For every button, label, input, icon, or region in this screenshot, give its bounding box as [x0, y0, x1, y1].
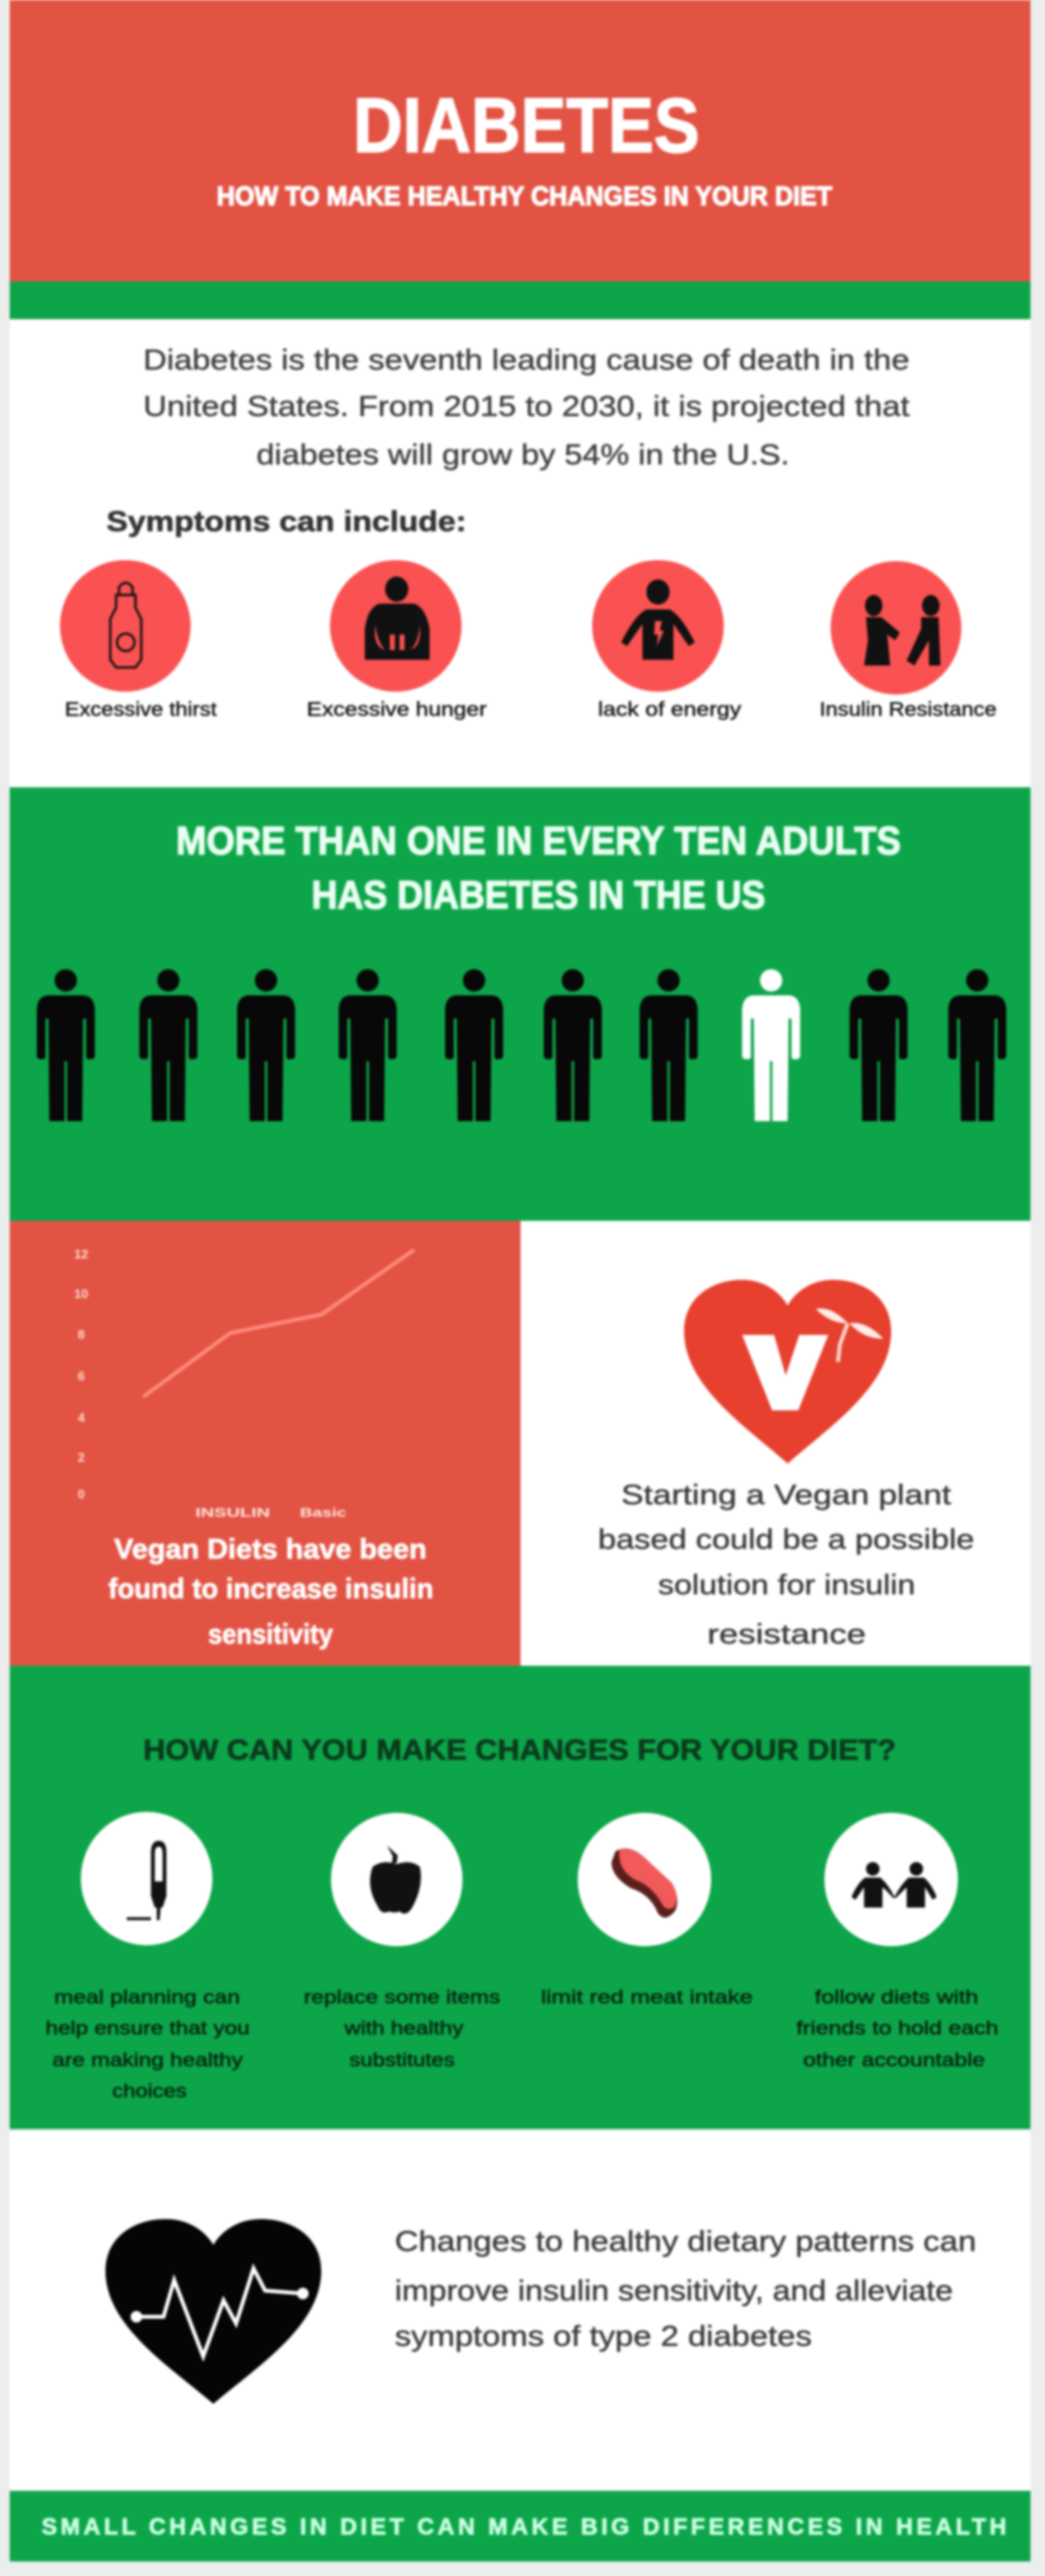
- text: symptoms of type 2 diabetes: [395, 2321, 812, 2353]
- tip: meal planning: [45, 1812, 250, 2102]
- text: resistance: [707, 1619, 866, 1650]
- intro paragraph: diabetes will grow by 54% in the U.S.: [256, 439, 790, 471]
- symptom: insulin resistance: [820, 561, 997, 721]
- line chart: 0: [77, 1487, 85, 1501]
- line chart: 8: [77, 1327, 85, 1342]
- caption: friends to hold each: [796, 2019, 999, 2039]
- text: Changes to healthy dietary patterns can: [395, 2226, 976, 2258]
- text: [598, 1480, 974, 1650]
- text: based could be a possible: [598, 1525, 974, 1555]
- label: lack of energy: [598, 699, 741, 721]
- caption: are making healthy: [52, 2051, 244, 2071]
- label: Insulin Resistance: [820, 699, 997, 721]
- green divider band: [10, 281, 1030, 319]
- caption: sensitivity: [208, 1619, 333, 1650]
- caption: [796, 1988, 999, 2071]
- tip: limit red meat: [541, 1813, 753, 2008]
- caption: [304, 1988, 500, 2071]
- panel: header: [10, 0, 1030, 281]
- caption: [45, 1988, 250, 2102]
- caption: choices: [112, 2082, 187, 2102]
- text: [395, 2226, 976, 2353]
- heading: MORE THAN ONE IN EVERY TEN ADULTS: [176, 818, 901, 863]
- tip: diet with friends: [796, 1813, 999, 2071]
- pictogram: ten people, one highlighted: [37, 969, 1006, 1121]
- footer band: [10, 2491, 1030, 2561]
- caption: Vegan Diets have been: [114, 1534, 427, 1565]
- symptom: excessive thirst: [60, 560, 217, 721]
- icon: pen: [127, 1841, 166, 1920]
- line chart: 12: [75, 1247, 88, 1261]
- caption: meal planning can: [54, 1988, 240, 2008]
- icon: black heart with pulse: [105, 2219, 321, 2404]
- line chart: [75, 1247, 414, 1520]
- footer text: SMALL CHANGES IN DIET CAN MAKE BIG DIFFERENCES IN HEALTH: [42, 2514, 1006, 2540]
- intro paragraph: United States. From 2015 to 2030, it is projected that: [143, 391, 911, 423]
- line chart: 6: [77, 1369, 85, 1383]
- text: improve insulin sensitivity, and alleviate: [395, 2275, 953, 2307]
- panel: one in ten adults: [10, 787, 1030, 1221]
- panel: vegan heart: [521, 1221, 1030, 1666]
- icon: two friends holding hands: [851, 1862, 937, 1908]
- icon: two people with injection: [864, 595, 940, 666]
- icon: vegan heart with sprout: [684, 1280, 891, 1464]
- line chart: INSULIN: [195, 1505, 270, 1520]
- symptom: excessive hunger: [307, 560, 487, 721]
- caption: follow diets with: [815, 1988, 978, 2008]
- intro paragraph: Diabetes is the seventh leading cause of death in the: [143, 344, 910, 376]
- symptoms heading: Symptoms can include:: [106, 506, 466, 538]
- label: Excessive hunger: [307, 699, 487, 721]
- caption: [108, 1534, 433, 1650]
- text: Starting a Vegan plant: [621, 1480, 951, 1511]
- icon: person with low battery: [621, 579, 695, 660]
- label: Excessive thirst: [65, 699, 217, 721]
- caption: with healthy: [343, 2019, 464, 2039]
- icon: apple: [370, 1846, 421, 1913]
- line chart: 10: [75, 1287, 88, 1301]
- panel: diet changes: [10, 1666, 1030, 2129]
- caption: replace some items: [304, 1988, 500, 2008]
- icon: water bottle: [110, 582, 141, 667]
- text: solution for insulin: [658, 1570, 915, 1601]
- caption: substitutes: [349, 2051, 455, 2071]
- caption: limit red meat intake: [541, 1988, 753, 2008]
- subtitle: HOW TO MAKE HEALTHY CHANGES IN YOUR DIET: [217, 181, 832, 211]
- tip: replace items: [304, 1813, 500, 2071]
- heading: [176, 818, 901, 917]
- panel: vegan diets chart: [10, 1221, 521, 1666]
- title: DIABETES: [353, 82, 700, 168]
- line chart: Basic: [300, 1505, 346, 1520]
- caption: found to increase insulin: [108, 1574, 433, 1605]
- intro paragraph: [143, 344, 911, 471]
- line chart: 2: [77, 1450, 85, 1465]
- symptom: lack of energy: [592, 560, 741, 721]
- caption: help ensure that you: [45, 2019, 250, 2039]
- icon: steak: [612, 1849, 677, 1917]
- heading: HAS DIABETES IN THE US: [312, 873, 765, 917]
- icon: person holding stomach: [365, 577, 430, 660]
- panel: healthy dietary patterns: [10, 2131, 1030, 2490]
- line chart: 4: [77, 1410, 85, 1425]
- panel: intro and symptoms: [10, 319, 1030, 786]
- heading: HOW CAN YOU MAKE CHANGES FOR YOUR DIET?: [143, 1734, 896, 1766]
- caption: other accountable: [803, 2051, 985, 2071]
